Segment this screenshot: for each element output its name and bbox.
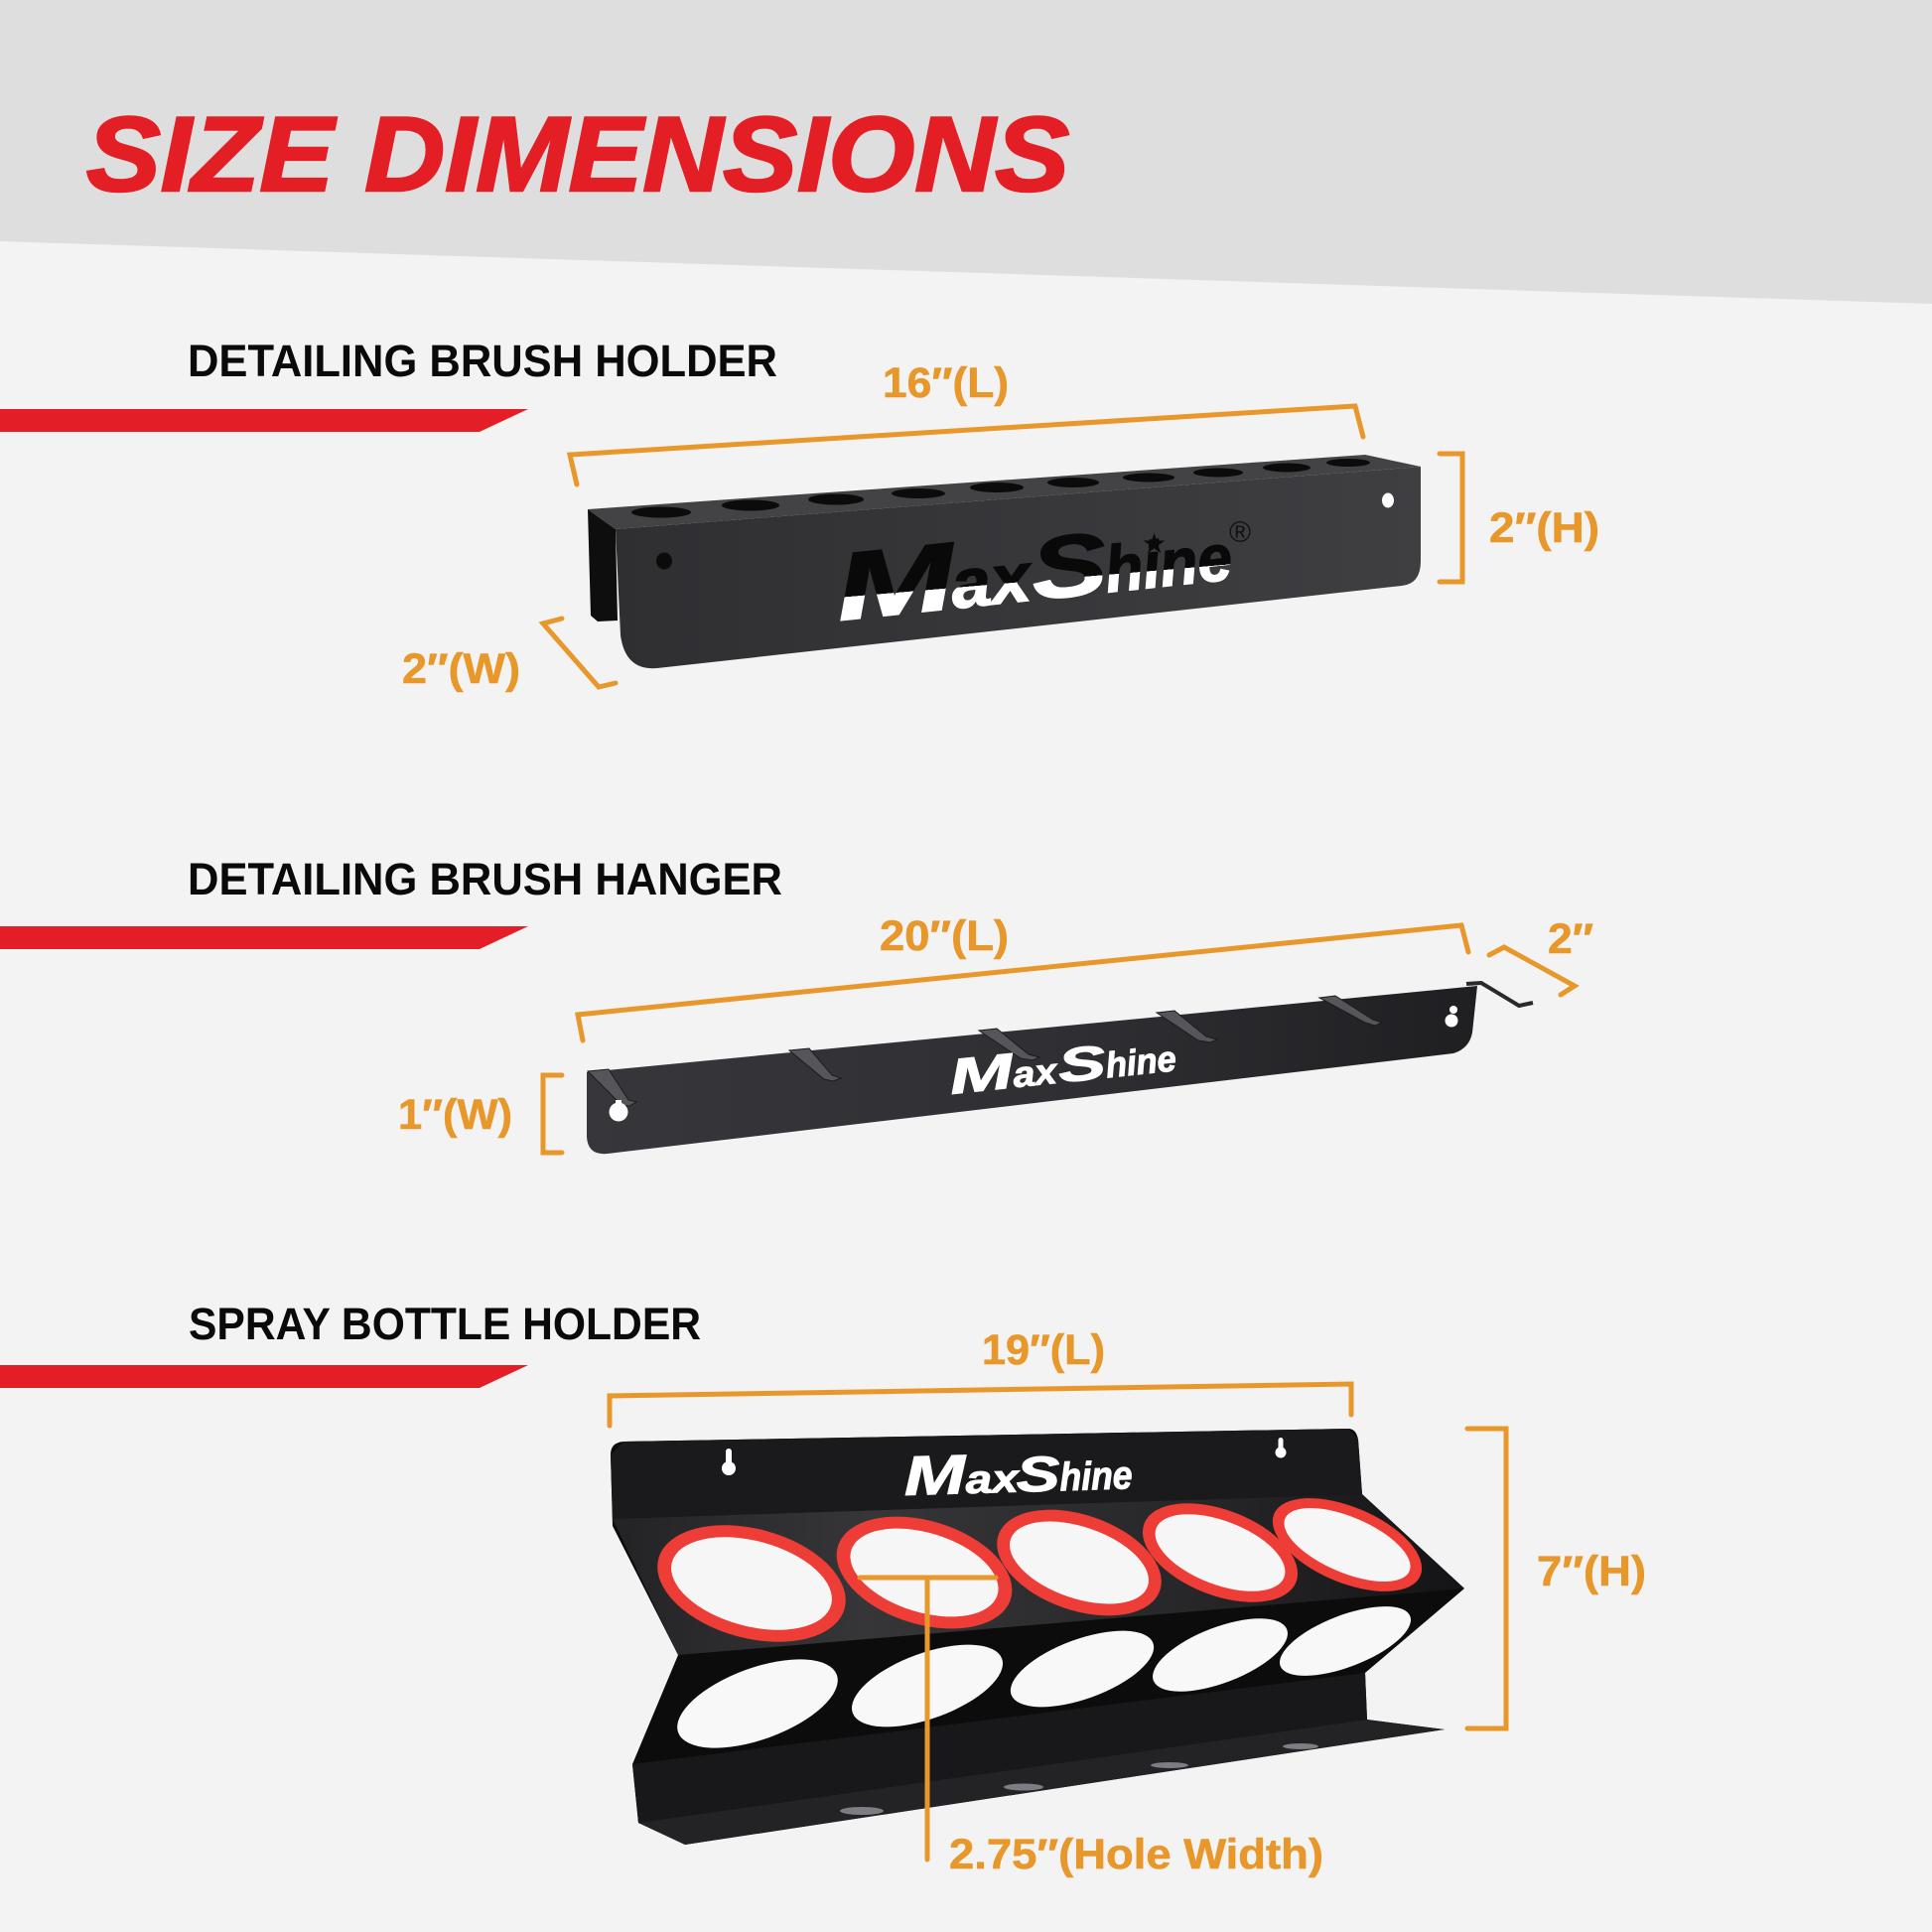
- section: detailing brush hanger: [0, 854, 1593, 1154]
- red bar: [0, 926, 528, 949]
- title: SIZE DIMENSIONS: [86, 94, 1069, 213]
- dimension: 16 inch length: 16″(L): [883, 359, 1009, 407]
- hooks: [588, 996, 1382, 1106]
- section: spray bottle holder: [0, 1299, 1646, 1878]
- logo: ax: [965, 1457, 1021, 1502]
- dimension: 16 inch length: [570, 359, 1363, 484]
- section: detailing brush holder: [0, 336, 1599, 693]
- logo: hine: [1101, 520, 1235, 606]
- logo: M: [830, 523, 963, 641]
- heading: brush hanger: DETAILING BRUSH HANGER: [188, 854, 782, 904]
- lower holes: [666, 1592, 1420, 1766]
- dimension: hole width: 2.75″(Hole Width): [949, 1831, 1323, 1878]
- dimension: 20 inch length: [578, 912, 1468, 1040]
- ring openings: [661, 1493, 1421, 1646]
- end hook: [1466, 983, 1533, 1006]
- heading: brush holder: DETAILING BRUSH HOLDER: [188, 336, 777, 386]
- tray holes: [840, 1743, 1318, 1815]
- dimension: hole width: [860, 1578, 1323, 1878]
- logo: M: [902, 1443, 968, 1507]
- dimension: 1 inch width: 1″(W): [398, 1091, 512, 1139]
- logo: S: [1016, 1446, 1060, 1503]
- dimension: 2 inch width: [402, 619, 616, 693]
- logo: [902, 1438, 1133, 1507]
- logo: [830, 494, 1236, 641]
- dimension: 1 inch width: [398, 1075, 562, 1153]
- red bar: [0, 409, 528, 432]
- heading: spray bottle holder: SPRAY BOTTLE HOLDER: [189, 1299, 701, 1349]
- dimension: 20 inch length: 20″(L): [880, 912, 1009, 960]
- product: spray bottle holder: [611, 1429, 1464, 1845]
- dimension: 2 inch width: 2″(W): [402, 645, 520, 693]
- red bar: [0, 1365, 528, 1388]
- logo: S: [1027, 513, 1111, 619]
- dimension: 2 inch depth: 2″: [1548, 915, 1593, 963]
- product: brush hanger: [587, 983, 1533, 1154]
- logo: [946, 1026, 1178, 1105]
- dimension: 7 inch height: 7″(H): [1537, 1548, 1646, 1595]
- dimension: 2 inch depth: [1489, 915, 1593, 995]
- dimension: 2 inch height: 2″(H): [1489, 504, 1599, 552]
- logo: ax: [947, 538, 1037, 623]
- logo: hine: [1059, 1453, 1133, 1499]
- logo star: ★: [1142, 527, 1167, 560]
- red rings: [644, 1479, 1435, 1661]
- header band: [0, 0, 1932, 304]
- logo: S: [1055, 1036, 1108, 1093]
- registered mark: ®: [1229, 516, 1251, 549]
- dimension: 19 inch length: 19″(L): [982, 1326, 1105, 1374]
- keyholes: [610, 1006, 1457, 1122]
- dimension: 2 inch height: [1440, 454, 1599, 582]
- dimension: 7 inch height: [1467, 1429, 1646, 1728]
- logo: M: [946, 1042, 1018, 1105]
- logo: hine: [1104, 1037, 1178, 1085]
- logo: ax: [1011, 1050, 1060, 1095]
- product: brush holder: [588, 455, 1421, 668]
- dimension: 19 inch length: [610, 1326, 1351, 1426]
- keyholes: [722, 1438, 1287, 1475]
